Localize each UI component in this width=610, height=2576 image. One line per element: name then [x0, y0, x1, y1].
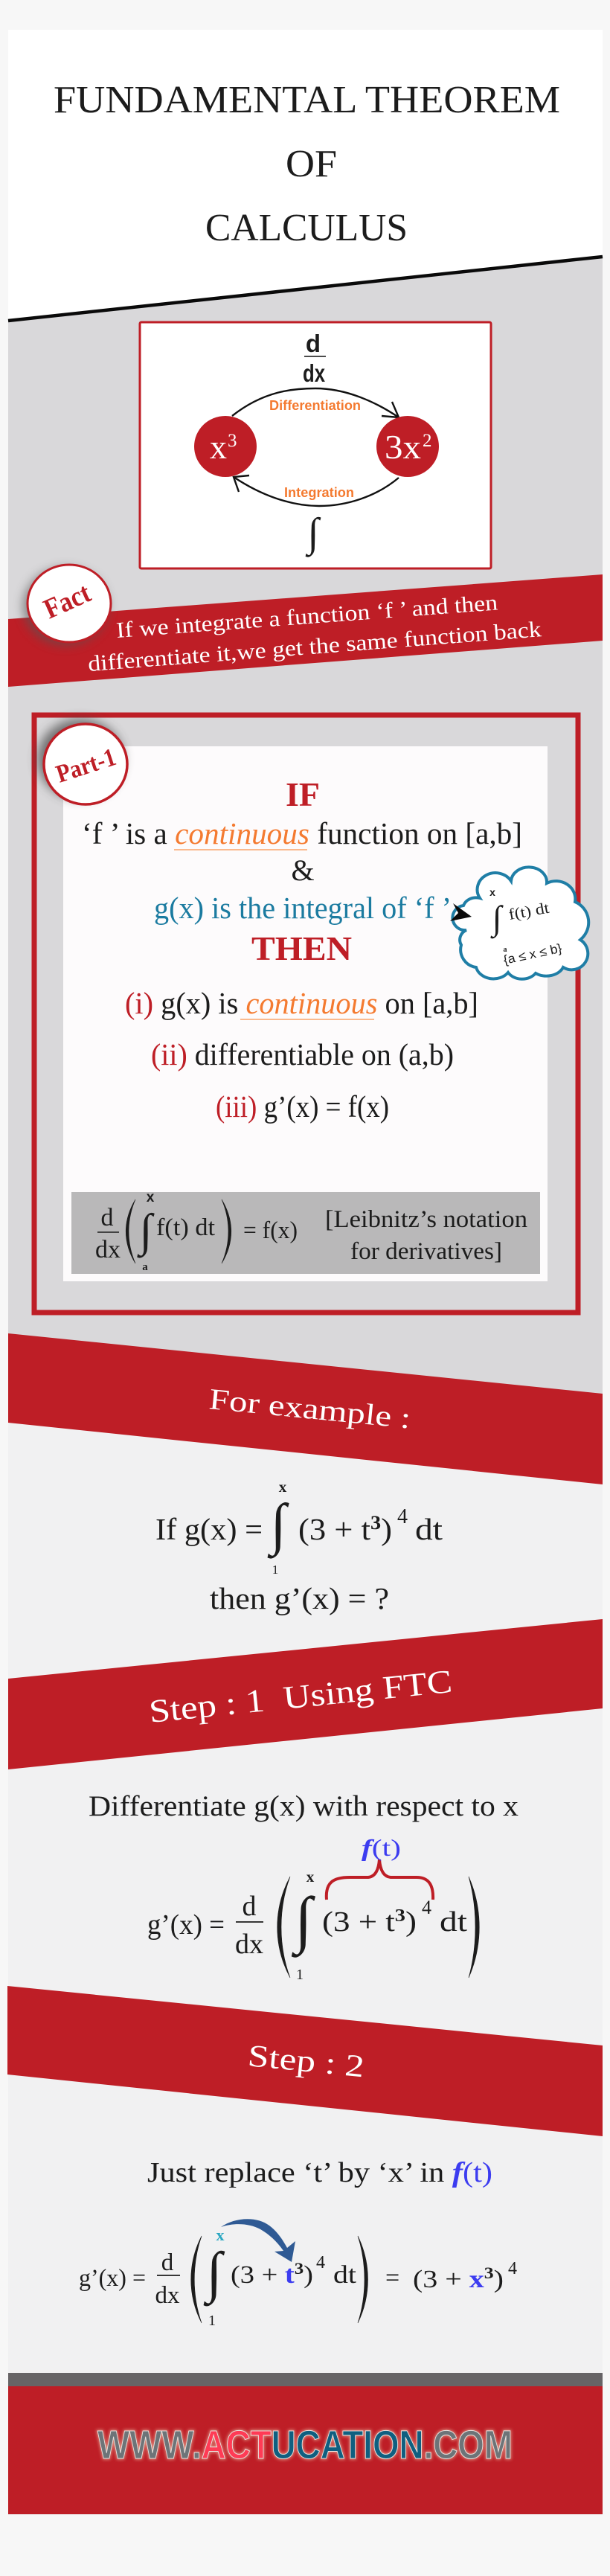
callout: integral cloud: x: [489, 886, 495, 898]
result ii: (ii) differentiable on (a,b): [151, 1037, 454, 1071]
heading: then: THEN: [251, 929, 352, 967]
step 1 formula: ∫: [291, 1885, 315, 1958]
example formula: 1: [272, 1563, 278, 1577]
box: leibniz notation: [Leibnitz’s notation: [325, 1206, 527, 1233]
circle: 3x squared: 3x: [385, 428, 421, 466]
banner: step 2: [7, 1986, 603, 2136]
arrow: integration: [234, 475, 399, 506]
title: FUNDAMENTAL THEOREM: [54, 79, 560, 121]
callout: integral cloud: {a ≤ x ≤ b}: [502, 941, 563, 967]
step 1 formula: 1: [296, 1967, 304, 1983]
label: f(t): f(t): [362, 1834, 401, 1861]
footer: [8, 2386, 603, 2514]
title: CALCULUS: [205, 207, 408, 249]
circle: x cubed: x: [210, 428, 227, 466]
banner: fact: differentiate it,we get the same function back: [87, 617, 542, 676]
website url: WWW.ACTUCATION.COM: [97, 2423, 513, 2467]
step 2 formula: 3: [484, 2263, 494, 2282]
example formula: ∫: [266, 1492, 289, 1559]
box: leibniz notation: [71, 1190, 540, 1274]
step 1 formula: 3: [395, 1906, 405, 1926]
step 2 formula: 4: [316, 2253, 325, 2272]
banner: step 1: [8, 1619, 603, 1769]
website url: WWW.ACTUCATION.COM: [97, 2423, 513, 2467]
label: differentiation: Differentiation: [269, 398, 361, 413]
example formula: (3 + t: [298, 1512, 365, 1546]
step 1 formula: x: [306, 1868, 315, 1885]
step 2 formula: (3 + x: [413, 2266, 482, 2293]
box: leibniz notation: f(t) dt: [156, 1214, 215, 1241]
ampersand: &: [291, 853, 315, 887]
arrow: substitute x for t: [221, 2219, 295, 2262]
banner: for example: For example :: [208, 1382, 412, 1435]
step 1 formula: (3 + t: [322, 1906, 384, 1938]
circle: 3x squared: 2: [423, 431, 431, 451]
box: leibniz notation: x: [147, 1190, 155, 1205]
panel: part 1 frame: [34, 715, 578, 1313]
box: leibniz notation: = f(x): [243, 1217, 298, 1244]
circle: x cubed: 3: [228, 431, 237, 451]
box: leibniz notation: d: [101, 1204, 113, 1231]
banner: fact: [8, 574, 603, 687]
title: [54, 79, 560, 249]
example formula: If g(x) =: [155, 1512, 263, 1546]
step 2 formula: g’(x) =: [79, 2265, 146, 2292]
label: d/dx: dx: [303, 359, 326, 387]
step 2 formula: 1: [208, 2313, 216, 2329]
banner: fact: If we integrate a function ‘f ’ and then: [115, 590, 498, 643]
footer stripe: [8, 2373, 603, 2386]
box: leibniz notation: a: [142, 1261, 148, 1273]
step 2 formula: (3 + t: [231, 2261, 293, 2289]
condition: g(x) integral: g(x) is the integral of ‘f ’: [154, 891, 452, 925]
step 2 formula: dx: [155, 2282, 180, 2309]
callout: integral cloud: [450, 867, 588, 979]
step 2 formula: ): [304, 2261, 313, 2289]
callout: integral cloud: a: [503, 946, 507, 954]
step 1 formula: 4: [422, 1897, 431, 1918]
step 1 formula: dx: [235, 1929, 263, 1960]
step 2 instruction: Just replace ‘t’ by ‘x’ in f(t): [147, 2157, 492, 2188]
circle: 3x squared: [376, 416, 439, 477]
label: d/dx: [303, 330, 326, 387]
panel: differentiation and integration diagram: [140, 322, 491, 568]
step 2 formula: dt: [333, 2261, 357, 2289]
step 2 formula: =: [385, 2264, 399, 2292]
badge: fact: [23, 565, 111, 645]
panel: part 1 content: [63, 746, 548, 1281]
result iii: (iii) g’(x) = f(x): [216, 1089, 389, 1124]
label: integration: Integration: [284, 485, 354, 500]
step 1 instruction: Differentiate g(x) with respect to x: [89, 1790, 519, 1822]
callout: integral cloud: ∫: [490, 899, 504, 939]
result i: (i) g(x) is continuous on [a,b]: [125, 986, 478, 1020]
step 2 formula: x: [216, 2226, 225, 2244]
example formula: dt: [415, 1512, 443, 1546]
header divider line: [8, 257, 603, 321]
label: d/dx: d: [306, 330, 321, 357]
condition: continuous function: ‘f ’ is a continuous function on [a,b]: [82, 816, 522, 850]
step 2 formula: 4: [508, 2259, 517, 2278]
step 2 formula: d: [161, 2249, 174, 2276]
example formula: 4: [397, 1505, 408, 1528]
badge: part 1: [37, 719, 127, 804]
brace: f(t): [327, 1859, 433, 1900]
step 1 formula: g’(x) =: [147, 1909, 225, 1941]
step 2 formula: [79, 2219, 517, 2329]
step 1 formula: dt: [440, 1906, 468, 1938]
callout: integral cloud: f(t) dt: [507, 899, 550, 923]
badge: part 1: Part-1: [53, 743, 119, 789]
banner: step 2: Step : 2: [246, 2039, 366, 2084]
step 2 formula: 3: [295, 2259, 304, 2278]
step 2 formula: ): [494, 2266, 504, 2293]
example question: then g’(x) = ?: [210, 1581, 389, 1615]
step 2 formula: ∫: [204, 2241, 225, 2307]
integral sign: ∫: [304, 510, 321, 557]
arrow: differentiation: [232, 388, 399, 417]
banner: step 1: Step : 1 Using FTC: [147, 1663, 454, 1730]
box: leibniz notation: for derivatives]: [350, 1238, 502, 1265]
step 1 formula: [147, 1834, 479, 1983]
box: leibniz notation: dx: [95, 1236, 121, 1263]
example formula: ): [381, 1512, 392, 1546]
title: OF: [286, 143, 337, 185]
badge: fact: Fact: [39, 577, 95, 625]
example formula: 3: [370, 1512, 381, 1534]
step 1 formula: d: [243, 1891, 256, 1922]
box: leibniz notation: ∫: [137, 1205, 155, 1258]
example formula: [155, 1478, 443, 1577]
example formula: x: [279, 1478, 287, 1496]
step 1 formula: ): [405, 1906, 417, 1938]
circle: x cubed: [194, 416, 257, 477]
banner: for example: [8, 1333, 603, 1484]
heading: if: IF: [286, 775, 320, 813]
